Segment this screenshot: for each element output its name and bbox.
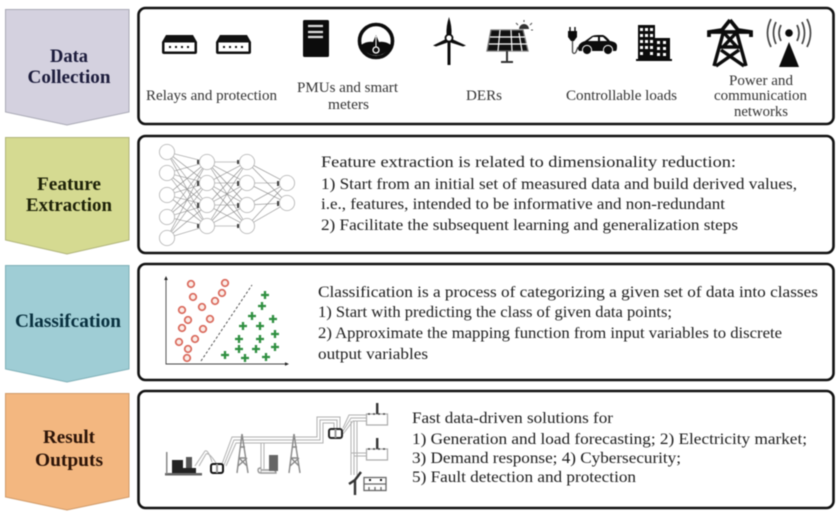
step arrow: Classification: Classifcation — [15, 312, 122, 332]
transformer 2 — [329, 429, 342, 438]
label: controllable loads: Controllable loads — [566, 88, 677, 104]
step arrow: Data Collection: Data — [50, 47, 88, 67]
label: PMUs and smart meters — [297, 80, 399, 113]
house with antenna 1 — [366, 403, 388, 425]
generator plant — [165, 452, 202, 476]
icon: buildings — [636, 25, 672, 61]
text: feature extraction description: 2) Facilitate the subsequent learning and generalization steps — [321, 217, 738, 234]
label: power and communication networks: communication — [714, 88, 807, 104]
label: PMUs and smart meters: PMUs and smart — [297, 80, 399, 96]
label: PMUs and smart meters: meters — [328, 97, 369, 113]
icon: PMU cabinet — [303, 20, 329, 57]
transformer 1 — [211, 464, 223, 473]
text: classification description: 1) Start with predicting the class of given data points; — [318, 304, 672, 321]
house with antenna 2 — [366, 438, 388, 460]
text: result outputs description: 1) Generation and load forecasting; 2) Electricity market; — [412, 431, 807, 448]
icon: solar panel — [487, 20, 533, 62]
wind unit — [349, 472, 361, 495]
label: power and communication networks: Power and — [729, 73, 793, 89]
panel: result outputs — [138, 391, 834, 508]
text: feature extraction description: Feature extraction is related to dimensionality reduction: — [321, 154, 736, 171]
scatter plot — [164, 276, 289, 366]
step arrow: Feature Extraction: Extraction — [26, 196, 113, 216]
text: result outputs description: Fast data-driven solutions for — [412, 410, 614, 427]
step arrow: Result Outputs — [6, 394, 129, 510]
label: power and communication networks — [714, 73, 807, 120]
icon: electric car — [568, 27, 617, 55]
panel: data collection — [138, 8, 834, 124]
step arrow: Feature Extraction: Feature — [37, 175, 101, 195]
text: result outputs description: 5) Fault detection and protection — [412, 469, 636, 486]
text: result outputs description — [412, 410, 807, 486]
text: feature extraction description: i.e., features, intended to be informative and non-redundant — [321, 196, 726, 213]
text: classification description — [318, 284, 818, 363]
meter box — [364, 478, 386, 490]
tower 2 — [289, 434, 300, 473]
label: power and communication networks: networks — [734, 104, 788, 120]
label: DERs: DERs — [466, 88, 502, 104]
icon: transmission tower — [709, 20, 751, 66]
label: relays and protection: Relays and protection — [146, 88, 277, 104]
substation — [258, 455, 278, 473]
text: feature extraction description — [321, 154, 797, 234]
tower 1 — [237, 434, 248, 473]
icon: wind turbine — [433, 17, 466, 65]
neural network diagram — [159, 144, 295, 246]
step arrow: Classification — [6, 266, 129, 382]
step arrow: Data Collection: Collection — [28, 68, 111, 88]
icon: smart meter — [360, 24, 392, 58]
text: classification description: Classification is a process of categorizing a given set of data into classes — [318, 284, 818, 301]
icon: relay 2 — [216, 35, 251, 54]
step arrow: Result Outputs: Result — [43, 428, 96, 448]
text: classification description: 2) Approximate the mapping function from input variables to discrete — [318, 325, 782, 342]
text: feature extraction description: 1) Start from an initial set of measured data and build derived values, — [321, 176, 797, 193]
icon: relay 1 — [162, 35, 197, 54]
text: classification description: output variables — [318, 346, 428, 363]
step arrow: Data Collection — [6, 10, 129, 125]
text: result outputs description: 3) Demand response; 4) Cybersecurity; — [412, 450, 681, 467]
panel: feature extraction — [138, 136, 834, 253]
power grid diagram — [165, 403, 388, 495]
panel: classification — [138, 264, 834, 380]
icon: radio antenna — [768, 19, 810, 67]
step arrow: Result Outputs: Outputs — [35, 451, 103, 471]
step arrow: Feature Extraction — [6, 138, 129, 254]
